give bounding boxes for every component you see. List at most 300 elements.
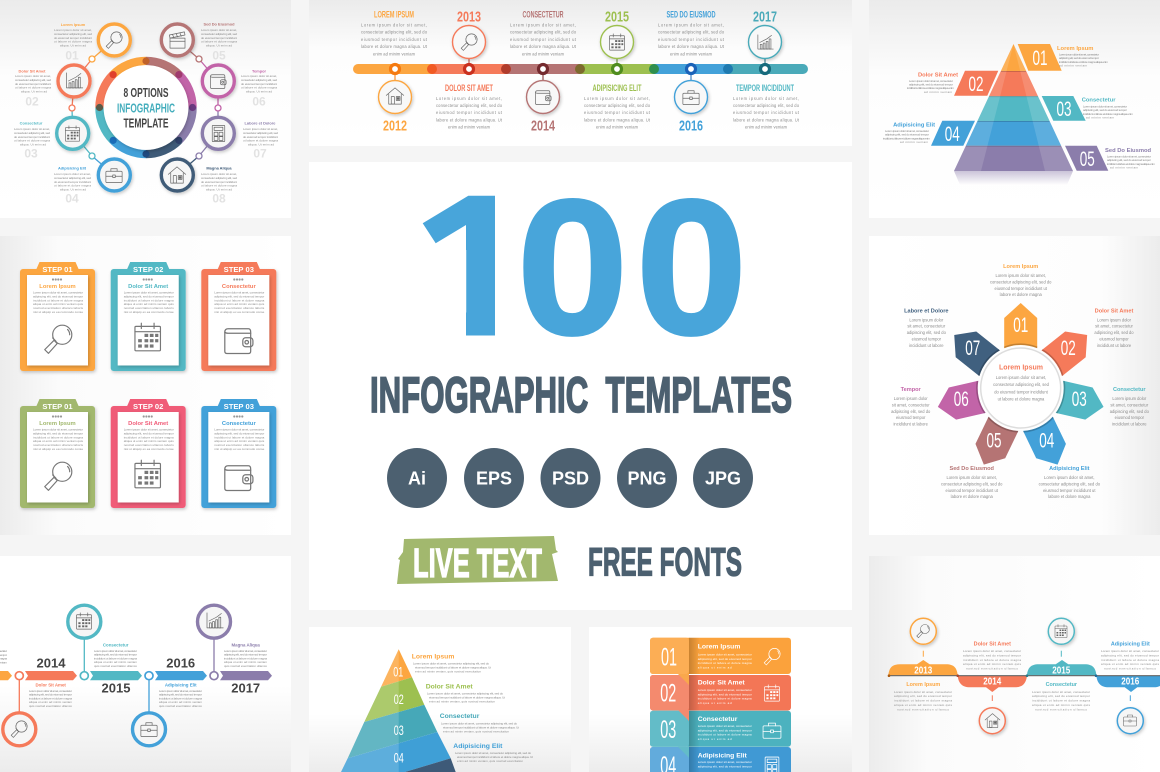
- label: Lorem Ipsum: [990, 264, 1052, 297]
- option 08 label: Lorem ipsum dolor sit amet,: [201, 172, 237, 176]
- label: Adipisicing Elit: adipiscing elit, sed do eiusmod tempor: [1101, 653, 1159, 657]
- timeline years: 2012: [383, 118, 407, 134]
- central ring segments: [100, 61, 192, 154]
- label: Adipisicing Elit: adipiscing elit, sed do eiusmod tempor: [159, 693, 202, 697]
- label: Consectetur: aliqua ut enim ad minim veniam quis: [1032, 703, 1091, 707]
- label: Tempor: Tempor: [901, 387, 922, 393]
- timeline headings: DOLOR SIT AMET: [445, 83, 493, 93]
- text block: Adipisicing Elit: enim ad minim veniam: [596, 125, 639, 130]
- pyramid left highlight: [341, 649, 399, 772]
- text block: Dolor Sit Amet: Lorem ipsum dolor sit amet,: [436, 96, 502, 101]
- option 07 label: 07: [253, 146, 267, 160]
- label: Tempor: incididunt ut labore: [894, 422, 929, 427]
- option 01 label: Lorem Ipsum: [61, 22, 86, 27]
- label 02: ad minim veniam: [924, 90, 952, 94]
- label 05: incididunt ut labore et dolore magna aliqua enim: [1107, 162, 1156, 166]
- timeline icons: [386, 34, 773, 104]
- stems to icon circles: [395, 59, 765, 80]
- timeline headings: CONSECTETUR: [522, 10, 564, 20]
- panel: horizontal timeline 2012-2017: [309, 0, 852, 146]
- label: Consectetur: incididunt ut labore: [1112, 422, 1147, 427]
- label: Consectetur: enim ad minim veniam, quis nostrud exercitation: [443, 729, 509, 733]
- label: Adipisicing Elit: [453, 743, 533, 763]
- pyramid numbers: 04: [394, 750, 404, 766]
- label: Adipisicing Elit: labore et dolore magna: [1048, 494, 1091, 499]
- petal numbers: 06: [954, 388, 969, 411]
- ring junction dots: [96, 57, 196, 158]
- centre text: Lorem Ipsum: [999, 364, 1043, 372]
- ribbon years: 2014: [983, 676, 1002, 688]
- label: Tempor: eiusmod tempor: [896, 415, 926, 420]
- card: step 03 coral: STEP 03: [224, 265, 254, 274]
- text block: Tempor Incididunt: consectetur adipiscing elit, sed do: [733, 103, 800, 108]
- tab 03: [1042, 96, 1086, 121]
- centre text: Lorem ipsum dolor sit amet,: [996, 375, 1046, 380]
- label: Consectetur: [440, 713, 519, 733]
- panel: step cards: [0, 236, 291, 535]
- label: Adipisicing Elit: aliqua ut enim ad minim veniam: [159, 700, 202, 704]
- card: step 01 green: incididunt ut labore et dolore magna: [33, 435, 83, 439]
- row 03: aliqua ut enim ad: [698, 737, 732, 741]
- label: Adipisicing Elit: Adipisicing Elit: [1049, 466, 1090, 472]
- card: step 03 blue: adipiscing elit, sed do eiusmod tempor: [214, 431, 264, 435]
- card: step 01 green: aliqua ut enim ad minim veniam quis: [33, 439, 84, 443]
- card: step 03 coral: Consectetur: [222, 284, 256, 290]
- row 04: Adipisicing Elit: [698, 752, 748, 760]
- label: Lorem Ipsum: nostrud exercitation ullamco: [897, 707, 949, 711]
- row 03: Consectetur: [698, 716, 738, 723]
- label 03: adipiscing elit, sed do eiusmod tempor: [1083, 108, 1127, 112]
- label: Labore et Dolore: incididunt ut labore: [909, 343, 944, 348]
- label: Lorem Ipsum: incididunt ut labore et dolore magna: [894, 699, 952, 703]
- row 03: incididunt ut labore et dolore magna: [698, 733, 752, 737]
- label 03: ad minim veniam: [1086, 116, 1114, 120]
- big number 100: [400, 157, 747, 376]
- label: Lorem Ipsum: [894, 682, 952, 711]
- label: Adipisicing Elit: Lorem ipsum dolor sit amet, consectetur: [1101, 649, 1159, 653]
- tab 02: 02: [968, 73, 984, 96]
- card: step 03 blue: nostrud exercitation ullamco laboris: [214, 443, 265, 447]
- card: step 03 blue: nisi ut aliquip ex ea commodo conse: [214, 447, 265, 451]
- label 04: ad minim veniam: [900, 140, 928, 144]
- years: 2015: [102, 680, 130, 696]
- option 02 label: Dolor Sit Amet: [19, 68, 46, 74]
- timeline headings: ADIPISICING ELIT: [592, 83, 642, 93]
- label: Consectetur: eiusmod tempor incididunt ut labore et dolore magna aliqua. Ut: [443, 725, 519, 729]
- panel: tilted pyramid: [309, 627, 571, 772]
- card: step 01 green: adipiscing elit, sed do eiusmod tempor: [33, 431, 83, 435]
- badge: live text: [397, 536, 558, 586]
- option 07 label: Labore et Dolore: [245, 120, 276, 126]
- option 05 label: aliqua. Ut enim ad: [206, 44, 232, 48]
- text block: Consectetur: Lorem ipsum dolor sit amet,: [510, 22, 576, 28]
- label: Consectetur: quis nostrud exercitation ullamco: [94, 664, 137, 668]
- card: step 03 blue: incididunt ut labore et dolore magna: [214, 435, 265, 439]
- card: step 01 green: [20, 399, 95, 508]
- years: 2017: [231, 680, 260, 696]
- option 02 label: ut labore et dolore magna: [15, 86, 51, 90]
- card: step 03 blue: aliqua ut enim ad minim veniam quis: [214, 439, 265, 443]
- text block: Sed Do Eiusmod: [658, 22, 725, 56]
- label: Dolor Sit Amet: aliqua ut enim ad minim veniam quis: [963, 662, 1022, 666]
- panel: ribbon timeline: [869, 556, 1160, 772]
- label: Dolor Sit Amet: Dolor Sit Amet: [426, 684, 473, 690]
- badge: PSD: PSD: [552, 468, 589, 488]
- label 04: Adipisicing Elit: [893, 122, 935, 128]
- label: Adipisicing Elit: [1101, 642, 1160, 671]
- row 02: adipiscing elit, sed do eiusmod tempor: [698, 692, 752, 696]
- row 02: aliqua ut enim ad: [698, 701, 732, 705]
- connector nodes: [69, 56, 221, 159]
- option 05 label: Sed Do Eiusmod: [204, 22, 235, 26]
- pin nodes: [15, 672, 218, 680]
- option 07 label: Lorem ipsum dolor sit amet,: [243, 127, 278, 131]
- label: Consectetur: Lorem ipsum dolor sit amet, consectetur adipiscing elit, sed do: [441, 721, 517, 725]
- timeline years: 2016: [679, 118, 703, 134]
- label: Adipisicing Elit: [1039, 466, 1101, 499]
- ribbon years: 2013: [914, 666, 933, 676]
- text block: Adipisicing Elit: labore et dolore magna aliqua. Ut: [584, 117, 651, 122]
- label: Consectetur: Lorem ipsum dolor: [1112, 396, 1147, 401]
- label 03: Lorem ipsum dolor sit amet, consectetur: [1083, 104, 1127, 108]
- label: Dolor Sit Amet: eiusmod tempor incididunt ut labore et dolore magna aliqua. Ut: [429, 695, 505, 699]
- label: Tempor: adipiscing elit, sed do: [891, 409, 931, 414]
- big number 100: 0: [517, 160, 628, 374]
- option 03 label: Consectetur: [20, 120, 43, 126]
- option 05 label: Lorem ipsum dolor sit amet,: [201, 28, 237, 32]
- option 01 label: 01: [65, 48, 79, 62]
- card: step 02 teal: STEP 02: [133, 265, 163, 274]
- label: Dolor Sit Amet: Lorem ipsum dolor sit amet, consectetur: [963, 649, 1021, 653]
- badge: EPS: EPS: [476, 468, 512, 488]
- label: Dolor Sit Amet: incididunt ut labore et dolore magna: [963, 658, 1021, 662]
- option 08 label: aliqua. Ut enim ad: [206, 188, 232, 192]
- label: Dolor Sit Amet: Dolor Sit Amet: [974, 642, 1011, 648]
- option 03 label: 03: [24, 146, 38, 160]
- card: step 02 teal: incididunt ut labore et dolore magna: [124, 298, 174, 302]
- baseline: [888, 675, 1160, 676]
- label 02: incididunt ut labore et dolore magna aliqua enim: [907, 86, 955, 90]
- label: Consectetur: adipiscing elit, sed do eiusmod tempor: [1032, 694, 1090, 698]
- tab 02: [954, 71, 998, 96]
- panel: pin timeline with arrows: [0, 556, 291, 772]
- label: Dolor Sit Amet: sit amet, consectetur: [1095, 324, 1134, 329]
- label: Adipisicing Elit: quis nostrud exercitation ullamco: [159, 704, 202, 708]
- label 02: Lorem ipsum dolor sit amet, consectetur: [909, 79, 953, 83]
- card: step 02 pink: Dolor Sit Amet: [128, 421, 168, 427]
- label: Adipisicing Elit: nostrud exercitation ullamco: [1104, 667, 1156, 671]
- label: Labore et Dolore: Lorem ipsum dolor: [909, 317, 944, 322]
- tab 04: [931, 121, 975, 146]
- label: Magna Aliqua: Lorem ipsum dolor sit amet, consectetur: [224, 649, 267, 653]
- card: step 01 orange: Lorem ipsum dolor sit amet, consectetur: [33, 290, 83, 294]
- petal numbers: 07: [965, 337, 980, 360]
- card: step 01 orange: nostrud exercitation ullamco laboris: [33, 306, 84, 310]
- option 06 label: aliqua. Ut enim ad: [246, 90, 272, 94]
- ribbon years: 2016: [1121, 676, 1140, 688]
- card: step 02 teal: Dolor Sit Amet: [128, 284, 168, 290]
- row 02: Dolor Sit Amet: [698, 680, 745, 686]
- option 03 label: do eiusmod tempor incididunt: [14, 135, 50, 139]
- timeline years: 2014: [531, 118, 555, 134]
- label 03: [1082, 98, 1134, 120]
- text block: partial previous: [0, 649, 8, 664]
- card: step 02 pink: Lorem ipsum dolor sit amet, consectetur: [124, 428, 174, 432]
- petal numbers: 05: [986, 430, 1002, 452]
- option 07 label: [243, 120, 278, 160]
- label: Sed Do Eiusmod: eiusmod tempor incididunt ut: [946, 488, 999, 493]
- label: Dolor Sit Amet: quis nostrud exercitation ullamco: [29, 704, 72, 708]
- pyramid numbers: 02: [394, 691, 404, 707]
- text block: Tempor Incididunt: enim ad minim veniam: [745, 125, 788, 130]
- row 02: incididunt ut labore et dolore magna: [698, 697, 752, 701]
- text block: Dolor Sit Amet: consectetur adipiscing elit, sed do: [436, 103, 503, 108]
- label 02: Dolor Sit Amet: [918, 72, 958, 78]
- label: Dolor Sit Amet: eiusmod tempor: [1099, 336, 1129, 341]
- label 01: Lorem Ipsum: [1057, 46, 1093, 52]
- years: 2014: [37, 656, 66, 670]
- label 05: Sed Do Eiusmod: [1105, 148, 1152, 154]
- label: Dolor Sit Amet: adipiscing elit, sed do eiusmod tempor: [963, 653, 1021, 657]
- big number 100: 0: [636, 160, 747, 374]
- option 05 label: 05: [212, 48, 226, 62]
- label: Consectetur: Consectetur: [440, 713, 480, 720]
- label 01: Lorem ipsum dolor sit amet, consectetur: [1059, 52, 1099, 56]
- option 08 label: [201, 166, 237, 206]
- petals: [934, 303, 1107, 472]
- label: Sed Do Eiusmod: labore et dolore magna: [951, 494, 993, 499]
- label: Magna Aliqua: Magna Aliqua: [232, 642, 260, 648]
- text block: Lorem Ipsum: [361, 22, 428, 56]
- option 07 label: aliqua. Ut enim ad: [248, 143, 274, 147]
- text block: Lorem Ipsum: consectetur adipiscing elit, sed do: [361, 30, 428, 35]
- option 07 label: consectetur adipiscing elit, sed: [243, 131, 278, 135]
- label 01: incididunt ut labore et dolore magna aliqua enim: [1059, 60, 1109, 64]
- label: Tempor: Lorem ipsum dolor: [894, 396, 928, 401]
- text block: Adipisicing Elit: [584, 96, 651, 130]
- label: Magna Aliqua: adipiscing elit, sed do eiusmod tempor: [224, 653, 267, 657]
- label: Adipisicing Elit: consectetur adipiscing elit, sed do: [1039, 481, 1101, 486]
- petal numbers: 02: [1061, 337, 1076, 360]
- label: Consectetur: eiusmod tempor: [1115, 415, 1145, 420]
- option 05 label: consectetur adipiscing elit, sed: [201, 32, 237, 36]
- row 04: [650, 747, 791, 772]
- option 06 label: Tempor: [252, 68, 266, 74]
- option 06 label: consectetur adipiscing elit, sed: [241, 78, 277, 82]
- option 06 label: ut labore et dolore magna: [241, 86, 277, 90]
- label: Lorem Ipsum: Lorem Ipsum: [1003, 264, 1038, 270]
- centre title: TEMPLATE: [124, 116, 169, 130]
- label: Adipisicing Elit: incididunt ut labore et dolore magna: [1101, 658, 1159, 662]
- text block: Tempor Incididunt: Lorem ipsum dolor sit amet,: [733, 96, 799, 101]
- centre title: 8 OPTIONS: [124, 85, 169, 100]
- card: step 01 orange: incididunt ut labore et dolore magna: [33, 298, 83, 302]
- centre disc: [104, 65, 188, 150]
- option 01 label: consectetur adipiscing elit, sed: [54, 32, 92, 36]
- option 02 label: aliqua. Ut enim ad: [21, 90, 47, 94]
- row 02: 02: [660, 680, 676, 708]
- centre text: ut labore et dolore magna: [998, 397, 1045, 402]
- card: step 01 green: Lorem ipsum dolor sit amet, consectetur: [33, 428, 83, 432]
- row 03: 03: [660, 716, 676, 744]
- card: step 03 blue: Lorem ipsum dolor sit amet, consectetur: [214, 428, 264, 432]
- card: step 03 blue: Consectetur: [222, 421, 256, 427]
- card: step 01 green: STEP 01: [42, 402, 73, 411]
- label: Adipisicing Elit: Adipisicing Elit: [1111, 642, 1150, 648]
- text block: Consectetur: enim ad minim veniam: [522, 51, 565, 56]
- option 03 label: aliqua. Ut enim ad: [20, 143, 46, 147]
- option 06 label: do eiusmod tempor incididunt: [241, 82, 277, 86]
- petal inner arcs: [974, 344, 1067, 435]
- pyramid layers: [341, 649, 456, 772]
- label 05: Lorem ipsum dolor sit amet, consectetur: [1107, 154, 1151, 158]
- card: step 01 orange: aliqua ut enim ad minim veniam quis: [33, 302, 84, 306]
- text block: Adipisicing Elit: consectetur adipiscing elit, sed do: [584, 103, 651, 108]
- option 04 label: 04: [65, 192, 79, 206]
- label: Dolor Sit Amet: Lorem ipsum dolor sit amet, consectetur adipiscing elit, sed do: [427, 691, 503, 695]
- card: step 03 coral: nostrud exercitation ullamco laboris: [214, 306, 265, 310]
- label 02: adipiscing elit, sed do eiusmod tempor: [909, 83, 953, 87]
- label: Adipisicing Elit: Adipisicing Elit: [453, 743, 503, 750]
- text block: Tempor Incididunt: eiusmod tempor incididunt ut: [733, 110, 800, 115]
- label: Dolor Sit Amet: Lorem ipsum dolor sit amet, consectetur: [29, 689, 72, 693]
- label: Lorem Ipsum: eiusmod tempor incididunt ut: [995, 286, 1048, 291]
- tab 05: 05: [1080, 148, 1095, 171]
- option 04 label: Adipisicing Elit: [58, 166, 87, 170]
- option 02 label: [15, 68, 51, 108]
- row 03: Lorem ipsum dolor sit amet, consectetur: [698, 724, 752, 728]
- text block: Dolor Sit Amet: enim ad minim veniam: [448, 125, 491, 130]
- petal numbers: 01: [1013, 314, 1028, 337]
- label: Labore et Dolore: sit amet, consectetur: [907, 324, 946, 329]
- tab 05: [1065, 146, 1108, 171]
- timeline years: [383, 8, 777, 134]
- pyramid layers: [954, 44, 1073, 171]
- badge: EPS: [464, 448, 524, 508]
- badge: Ai: [387, 448, 447, 508]
- text block: Consectetur: labore et dolore magna aliqua. Ut: [510, 44, 577, 49]
- row 01: adipiscing elit, sed do eiusmod tempor: [698, 657, 752, 661]
- option 06 label: 06: [252, 94, 266, 108]
- dashes to icon circles: [923, 651, 1130, 701]
- card: step 03 coral: Lorem ipsum dolor sit amet, consectetur: [214, 290, 264, 294]
- panel: stacked ribbon rows: [589, 627, 852, 772]
- label: Magna Aliqua: [224, 642, 268, 668]
- label: Tempor: sit amet, consectetur: [892, 402, 930, 407]
- text block: Sed Do Eiusmod: enim ad minim veniam: [670, 51, 713, 56]
- row 04: Lorem ipsum dolor sit amet, consectetur: [698, 760, 752, 764]
- timeline headings: LOREM IPSUM: [374, 10, 414, 20]
- text block: Consectetur: consectetur adipiscing elit, sed do: [510, 30, 577, 35]
- label 05: [1105, 148, 1156, 170]
- pyramid numbers: 03: [394, 722, 404, 738]
- tab 01: [1018, 44, 1062, 71]
- card: step 03 coral: [201, 262, 276, 371]
- centre title: INFOGRAPHIC: [117, 100, 175, 116]
- ribbon years: 2015: [1052, 666, 1071, 676]
- badge: Ai: Ai: [408, 468, 426, 488]
- label: Adipisicing Elit: [159, 682, 202, 708]
- label: Adipisicing Elit: Lorem ipsum dolor sit amet, consectetur: [159, 689, 202, 693]
- pin stems: [19, 638, 214, 712]
- centre text: [993, 364, 1050, 402]
- text block: Dolor Sit Amet: labore et dolore magna aliqua. Ut: [436, 117, 503, 122]
- text block: Dolor Sit Amet: [436, 96, 503, 130]
- text block: Adipisicing Elit: Lorem ipsum dolor sit amet,: [584, 96, 650, 101]
- label: Consectetur: [94, 642, 138, 668]
- timeline bar: [353, 64, 808, 74]
- option 06 label: [241, 68, 277, 108]
- label: Consectetur: [1032, 682, 1090, 711]
- pyramid numbers: 01: [393, 664, 403, 680]
- big number 100: 1: [422, 157, 531, 376]
- label: Dolor Sit Amet: Dolor Sit Amet: [1095, 308, 1133, 314]
- card: step 01 orange: nisi ut aliquip ex ea commodo conse: [33, 310, 83, 314]
- panel: centre title card: [309, 157, 852, 610]
- option 02 label: 02: [25, 94, 39, 108]
- heading: infographic templates: INFOGRAPHIC TEMPLATES: [370, 366, 792, 423]
- option 01 label: aliqua. Ut enim ad: [60, 44, 86, 48]
- label: Sed Do Eiusmod: Sed Do Eiusmod: [949, 466, 995, 472]
- label: Lorem Ipsum: adipiscing elit, sed do eiusmod tempor: [894, 694, 952, 698]
- card: step 03 coral: nisi ut aliquip ex ea commodo conse: [214, 310, 265, 314]
- timeline headings: SED DO EIUSMOD: [666, 10, 716, 20]
- option circles: [57, 24, 234, 191]
- option 03 label: [14, 120, 50, 160]
- label: Dolor Sit Amet: adipiscing elit, sed do: [1094, 330, 1134, 335]
- option 05 label: do eiusmod tempor incididunt: [201, 36, 237, 40]
- text block: Lorem Ipsum: labore et dolore magna aliqua. Ut: [361, 44, 428, 49]
- option 04 label: Lorem ipsum dolor sit amet,: [54, 172, 91, 176]
- centre title: [117, 85, 175, 130]
- petal numbers: 04: [1039, 430, 1054, 452]
- label: Consectetur: aliqua ut enim ad minim veniam: [94, 660, 138, 664]
- text block: Sed Do Eiusmod: Lorem ipsum dolor sit amet,: [658, 22, 724, 28]
- label: Consectetur: [1110, 387, 1150, 427]
- label 04: Lorem ipsum dolor sit amet, consectetur: [885, 129, 929, 133]
- label: Consectetur: incididunt ut labore et dolore magna: [94, 656, 137, 660]
- option 04 label: aliqua. Ut enim ad: [60, 188, 86, 192]
- label: Lorem Ipsum: Lorem ipsum dolor sit amet, consectetur adipiscing elit, sed do: [413, 661, 489, 665]
- label 01: adipiscing elit, sed do eiusmod tempor: [1059, 56, 1099, 60]
- arrow segments: [0, 671, 272, 680]
- label: Dolor Sit Amet: aliqua ut enim ad minim veniam: [29, 700, 72, 704]
- pyramid reflection: [954, 171, 1073, 185]
- petal numbers: [954, 314, 1087, 452]
- card: step 01 green: nisi ut aliquip ex ea commodo conse: [33, 447, 83, 451]
- option 08 label: ut labore et dolore magna: [201, 184, 237, 188]
- label: Consectetur: Lorem ipsum dolor sit amet, consectetur: [94, 649, 137, 653]
- label: Dolor Sit Amet: Lorem ipsum dolor: [1097, 317, 1132, 322]
- label: Consectetur: incididunt ut labore et dolore magna: [1032, 699, 1090, 703]
- option 08 label: 08: [212, 192, 226, 206]
- label: Lorem Ipsum: labore et dolore magna: [1000, 292, 1042, 297]
- label: Dolor Sit Amet: [29, 682, 72, 708]
- text block: Lorem Ipsum: Lorem ipsum dolor sit amet,: [361, 22, 427, 28]
- timeline icon circles: [378, 26, 782, 114]
- label: Lorem Ipsum: enim ad minim veniam, quis nostrud exercitation: [415, 669, 481, 673]
- label: Consectetur: Consectetur: [1046, 682, 1078, 688]
- card: step 03 coral: incididunt ut labore et dolore magna: [214, 298, 265, 302]
- label 05: ad minim veniam: [1110, 166, 1138, 170]
- option 05 label: [201, 22, 237, 62]
- card: step 02 pink: STEP 02: [133, 402, 163, 411]
- row 03: [650, 711, 791, 758]
- text block: Lorem Ipsum: eiusmod tempor incididunt ut: [361, 37, 428, 42]
- label 05: adipiscing elit, sed do eiusmod tempor: [1107, 158, 1151, 162]
- label: Tempor: [891, 387, 931, 427]
- badge: live text: LIVE TEXT: [413, 540, 542, 586]
